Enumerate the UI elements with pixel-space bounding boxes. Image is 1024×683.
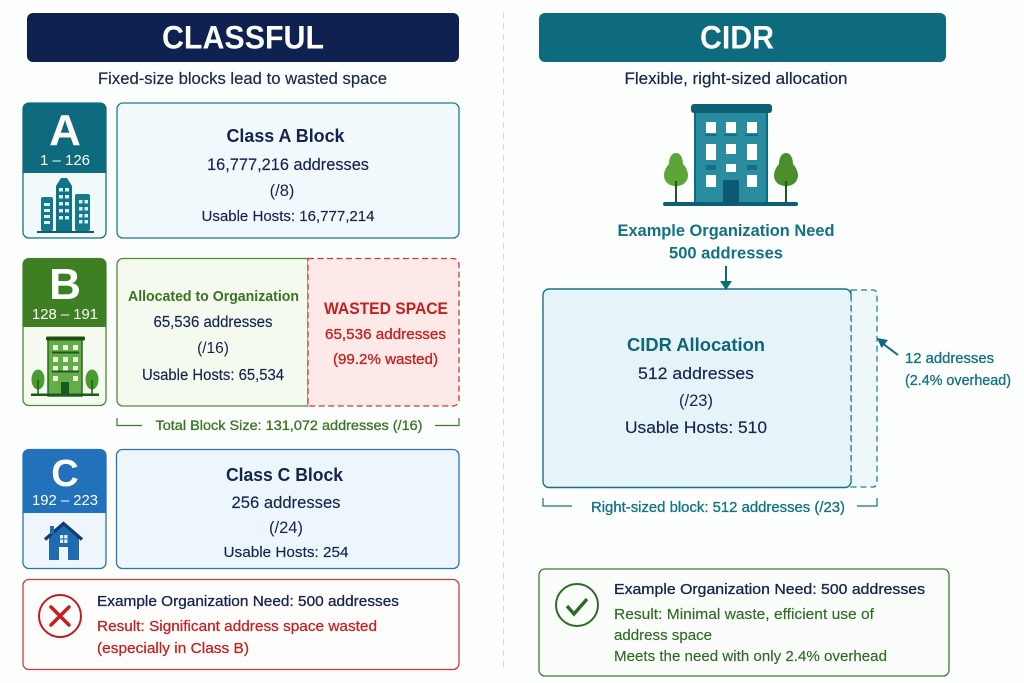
panel: class B wasted space: (99.2% wasted) (333, 351, 438, 368)
arrow: overhead pointer (877, 338, 898, 355)
label: overhead: (2.4% overhead) (905, 373, 1011, 389)
panel: class C badge: C (51, 453, 79, 495)
panel: class B wasted space (308, 258, 459, 406)
panel: class B allocated: (/16) (197, 340, 229, 357)
panel: class B wasted space: WASTED SPACE (324, 300, 448, 318)
panel: class C block: Usable Hosts: 254 (224, 544, 348, 561)
label: example organization need: 500 addresses (669, 244, 783, 262)
panel: overhead block (851, 290, 877, 487)
icon: red cross (39, 595, 81, 637)
icon: check mark (556, 584, 598, 626)
panel: CIDR allocation: (/23) (679, 392, 713, 410)
callout: classful result: (especially in Class B) (97, 640, 249, 657)
panel: class A block (117, 103, 459, 238)
callout: CIDR result (539, 569, 949, 676)
panel: class C block: (/24) (269, 519, 303, 537)
panel: classful (23, 13, 459, 670)
label: example organization need (618, 221, 834, 262)
panel: class C badge: 192 – 223 (32, 493, 98, 509)
panel: CIDR allocation: 512 addresses (638, 365, 754, 383)
subtitle: classful: Fixed-size blocks lead to wasted space (98, 70, 387, 88)
bracket: right-sized block: Right-sized block: 512 addresses (/23) (591, 500, 845, 516)
arrow: need to allocation (720, 266, 732, 290)
panel: CIDR allocation (543, 289, 851, 488)
callout: CIDR result: Meets the need with only 2.4% overhead (614, 648, 887, 665)
panel: class B allocated: Usable Hosts: 65,534 (142, 367, 284, 384)
heading: CIDR: CIDR (700, 20, 774, 56)
panel: class B badge: 128 – 191 (32, 307, 98, 323)
bracket: total block size: Total Block Size: 131,072 addresses (/16) (156, 417, 422, 433)
panel: class B badge: B (49, 260, 81, 309)
subtitle: CIDR: Flexible, right-sized allocation (624, 70, 848, 88)
panel: class B allocated: Allocated to Organization (128, 288, 299, 305)
heading: classful (27, 13, 459, 62)
callout: CIDR result: address space (614, 627, 712, 644)
panel: class B allocated: 65,536 addresses (154, 314, 273, 331)
panel: class A badge: 1 – 126 (40, 153, 90, 169)
panel: class A block: Class A Block (226, 126, 345, 146)
callout: CIDR result: Example Organization Need: 500 addresses (614, 581, 925, 598)
panel: class A badge: A (49, 106, 81, 155)
callout: CIDR result: Result: Minimal waste, efficient use of (614, 606, 875, 623)
icon: office towers (37, 178, 94, 233)
panel: class A badge (23, 103, 106, 238)
panel: class A block: 16,777,216 addresses (207, 156, 369, 174)
heading: classful: CLASSFUL (162, 20, 324, 56)
panel: class B allocated (117, 258, 308, 406)
icon: CIDR building with trees (663, 104, 798, 206)
heading: CIDR (539, 13, 946, 62)
panel: class B badge (23, 258, 106, 406)
panel: CIDR allocation: Usable Hosts: 510 (625, 419, 767, 437)
icon: green building with trees (31, 336, 99, 396)
panel: CIDR (539, 13, 1011, 676)
panel: class B wasted space: 65,536 addresses (325, 326, 446, 343)
panel: class C block: 256 addresses (232, 494, 340, 512)
label: example organization need: Example Organization Need (618, 221, 834, 240)
label: overhead: 12 addresses (905, 351, 994, 367)
panel: class C block (116, 450, 459, 568)
label: overhead (905, 351, 1011, 389)
icon: house (45, 524, 82, 560)
panel: CIDR allocation: CIDR Allocation (627, 334, 765, 355)
callout: classful result (23, 580, 459, 670)
panel: class C block: Class C Block (226, 465, 344, 485)
callout: classful result: Example Organization Need: 500 addresses (97, 593, 399, 610)
bracket: right-sized block (543, 498, 877, 516)
panel: class C badge (23, 450, 106, 568)
panel: class A block: (/8) (270, 182, 294, 200)
callout: classful result: Result: Significant address space wasted (97, 618, 377, 635)
panel: class A block: Usable Hosts: 16,777,214 (202, 208, 374, 225)
